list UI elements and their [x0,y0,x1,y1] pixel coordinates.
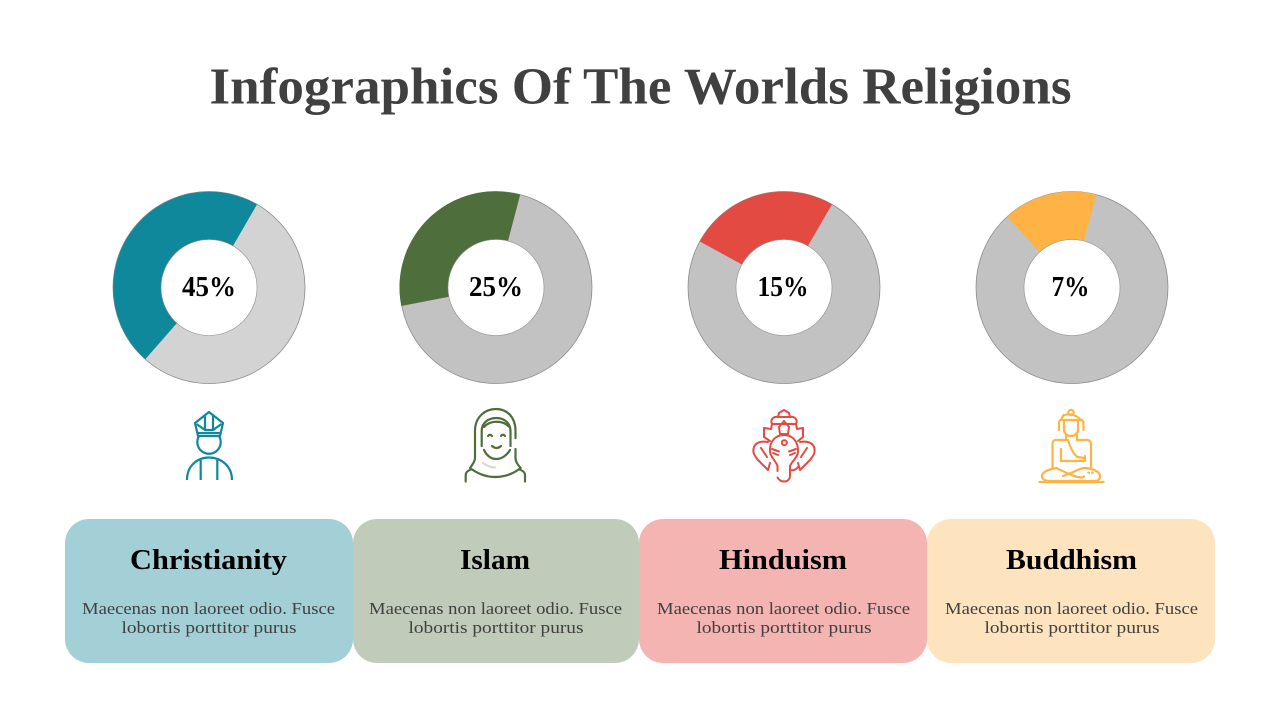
panel: Hinduism [639,519,927,663]
text block: Islam description [369,599,622,637]
text block: Hinduism description: lobortis porttitor purus [696,618,872,637]
heading: Christianity: Christianity [130,544,288,576]
icon: seated Buddha [1040,410,1104,482]
text block: Islam description: Maecenas non laoreet odio. Fusce [369,599,622,618]
panel: Christianity [65,519,353,663]
donut chart: Buddhism 7% [976,192,1168,384]
donut chart: Christianity 45%: 45% [182,272,236,303]
heading: Buddhism: Buddhism [1006,544,1137,576]
heading: Islam: Islam [460,544,530,576]
title: Infographics Of The Worlds Religions [210,58,1072,116]
text block: Hinduism description [657,599,910,637]
donut chart: Christianity 45% [113,192,305,384]
donut chart: Hinduism 15% [688,192,880,384]
icon: woman with hijab [466,409,525,482]
panel: Buddhism [927,519,1215,663]
donut chart: Hinduism 15%: 15% [758,272,808,303]
text block: Buddhism description: Maecenas non laoreet odio. Fusce [945,599,1198,618]
text block: Islam description: lobortis porttitor purus [408,618,584,637]
text block: Hinduism description: Maecenas non laoreet odio. Fusce [657,599,910,618]
donut chart: Islam 25% [399,191,592,384]
text block: Christianity description: lobortis porttitor purus [122,618,296,637]
icon: bishop with mitre [187,412,232,480]
text block: Buddhism description: lobortis porttitor purus [984,618,1160,637]
text block: Christianity description: Maecenas non laoreet odio. Fusce [82,599,335,618]
text block: Christianity description [82,599,335,637]
donut chart: Islam 25%: 25% [469,272,523,303]
text block: Buddhism description [945,599,1198,637]
heading: Hinduism: Hinduism [719,544,847,576]
panel: Islam [353,519,639,663]
icon: Ganesha [753,410,815,482]
donut chart: Buddhism 7%: 7% [1052,272,1090,303]
